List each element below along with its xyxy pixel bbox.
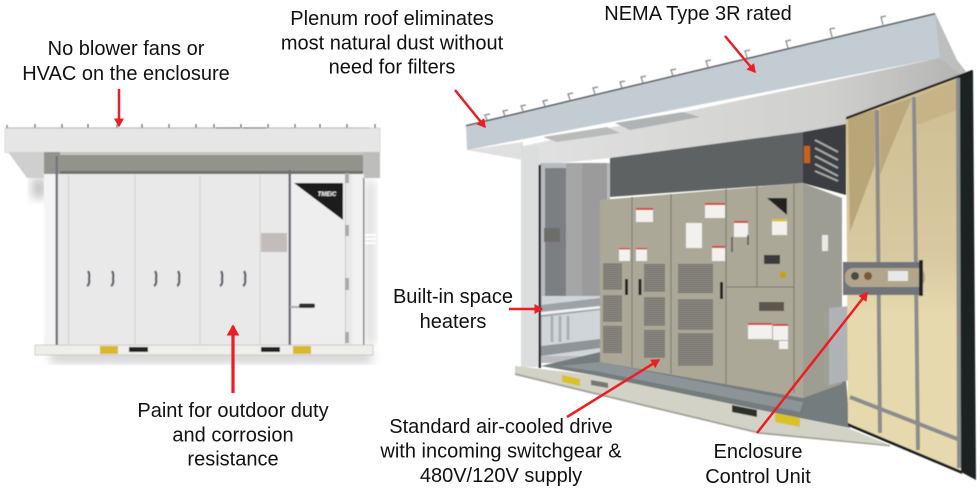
left interior [540,163,610,363]
label: enclosure control unit: Control Unit [705,466,811,488]
roof underside and lintel [523,58,962,170]
label: standard drive: 480V/120V supply [420,465,582,487]
left post [521,146,539,367]
arrow: NEMA [725,36,755,72]
roof top panel [466,13,940,150]
hinges [345,173,349,343]
arrow: plenum roof [455,90,485,127]
drive side panel [803,183,842,398]
label: plenum roof: Plenum roof eliminates [290,8,494,30]
space heaters [541,298,600,317]
right enclosure photo [466,13,976,480]
arrow: paint [231,326,235,393]
label: no blower fans: HVAC on the enclosure [22,63,230,85]
drive logo [767,198,787,215]
base frame [515,366,890,445]
enclosure body [44,174,364,345]
label: no blower fans: No blower fans or [48,38,205,60]
handles [87,271,245,286]
label: standard drive: with incoming switchgear & [379,440,622,462]
nameplate [261,233,287,252]
right edge glare [365,235,376,243]
vent grilles [603,263,713,366]
arrow: heaters [509,308,542,310]
roof [5,128,380,152]
door shade patches [848,110,875,232]
louvre unit [803,124,846,195]
label: standard drive: Standard air-cooled drive [389,416,613,438]
door ribs [877,78,959,468]
arrow: enclosure control unit [757,293,867,433]
roof clips [485,16,886,120]
roof underside [8,152,46,178]
label: space heaters: heaters [420,311,486,333]
label: paint: resistance [187,448,279,470]
door [291,174,345,345]
label: NEMA: NEMA Type 3R rated [604,3,792,25]
roof ridge clips [7,124,375,128]
duct [610,132,803,197]
roof left overhang underside [467,142,523,160]
arrow: standard drive [567,360,659,417]
label: paint: Paint for outdoor duty [137,400,329,422]
panel seams [68,175,260,344]
door latch [290,306,300,308]
arrow: no blower fans [118,89,120,126]
label: enclosure control unit: Enclosure [714,441,802,463]
drive cabinet [600,183,803,398]
enclosure control unit [843,262,920,295]
keypad [764,255,780,264]
logo triangle [294,183,343,220]
left enclosure photo: TMEiC [318,192,337,198]
open door [846,72,976,477]
base skid [35,345,373,355]
roof vents [615,112,700,130]
warning labels [619,203,788,349]
door handles [625,279,628,295]
label: plenum roof: most natural dust without [281,32,504,54]
label: paint: and corrosion [172,424,294,446]
roof end shadow [925,13,968,80]
ground shadow [50,353,372,362]
label: space heaters: Built-in space [393,286,513,308]
label: plenum roof: need for filters [329,56,455,78]
left enclosure photo [5,124,380,362]
floor [541,352,850,428]
side unit [829,306,850,385]
